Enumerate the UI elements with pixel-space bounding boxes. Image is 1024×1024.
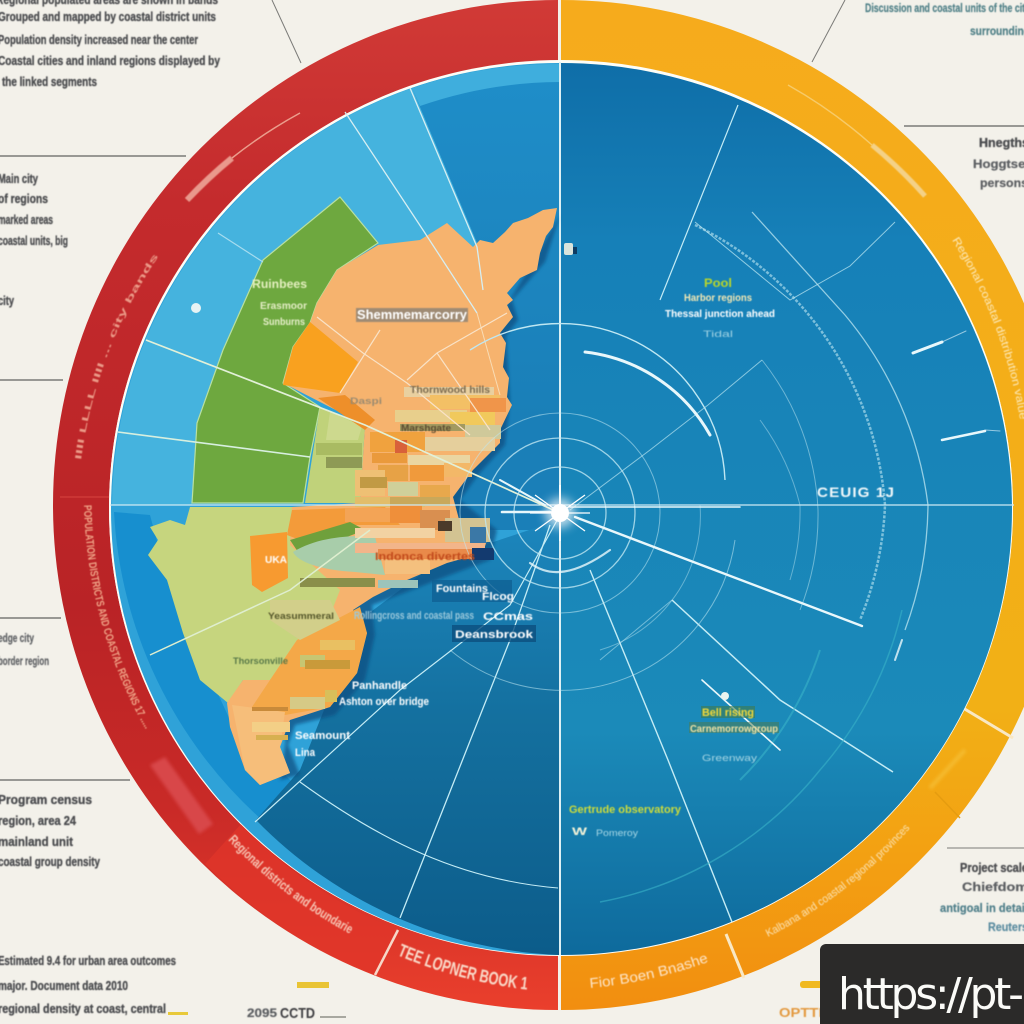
map: regions (148, 197, 557, 785)
footer label: left: CCTD (280, 1005, 315, 1022)
label: mosaic small labels: Daspi (350, 396, 382, 406)
ring highlight: red streak (150, 757, 213, 834)
text block: top left (0, 0, 220, 89)
watermark box: https://pt- (838, 969, 1024, 1020)
label: coast: Ashton over bridge (339, 696, 429, 708)
region: green band (290, 522, 365, 555)
label: green region (252, 277, 307, 328)
text block: upper left (0, 172, 68, 308)
label: upper right sea: Tidal (703, 329, 733, 339)
label: upper right sea (665, 276, 775, 339)
region: south orange coast (250, 607, 367, 715)
label: upper right sea: Harbor regions (684, 293, 752, 304)
ring labels: Regional coastal distribution values (952, 236, 1024, 420)
disc: upper-left light sector (112, 88, 480, 505)
text block: top left: Population density increased near the center (0, 33, 198, 47)
label: mosaic small labels: Thornwood hills (410, 385, 490, 396)
ring labels: Regional districts and boundaries (228, 834, 353, 934)
disc: upper sea wedge (412, 64, 559, 530)
label: coast: Flcog (482, 591, 514, 603)
grid: concentric arcs (450, 212, 928, 902)
label: lower right sea (689, 692, 779, 763)
text block: mid left: border region (0, 656, 49, 668)
text block: upper left: coastal units, big (0, 234, 68, 248)
text block: lower left: mainland unit (0, 835, 74, 849)
disc: top light band (412, 64, 559, 106)
map labels (233, 276, 895, 838)
label: upper right sea: Pool (704, 276, 732, 290)
region: orange south block (250, 532, 288, 592)
label: coast (295, 580, 536, 759)
label: mosaic small labels: UKA (265, 555, 287, 566)
text block: lower left: coastal group density (0, 855, 100, 869)
text block: upper right: Hoggtsel (973, 159, 1024, 171)
footer label: right (779, 981, 839, 1020)
text block: lower left: region, area 24 (0, 814, 76, 828)
map disc (109, 60, 1013, 956)
disc: left half (111, 63, 559, 955)
region: pale band (270, 600, 340, 640)
region: green west (192, 197, 378, 503)
footer label: left: 2095 (247, 1008, 278, 1020)
label: coast: Seamount (295, 730, 350, 742)
text block: bottom left: major. Document data 2010 (0, 979, 128, 993)
footer label: right: OPTTEN (779, 1005, 839, 1020)
label: green region: Ruinbees (252, 277, 307, 291)
text block: lower left (0, 793, 100, 869)
center star (530, 485, 590, 541)
disc: right half (561, 63, 1012, 955)
region: bright orange (283, 322, 358, 393)
text block: top right (865, 3, 1024, 38)
ring highlight: lower red segment (205, 824, 398, 975)
label: mosaic small labels (265, 385, 490, 566)
region: orange band (287, 507, 400, 540)
region: orange strip (318, 395, 375, 430)
map: coastline shadow (250, 215, 560, 780)
label: lower right sea: Carnemorrowgroup (690, 724, 778, 735)
label: lower right sea: Greenway (702, 753, 758, 763)
text block: lower right: Chiefdom (962, 882, 1024, 894)
label: coast: Fountains (436, 583, 488, 595)
label: bottom sea: Gertrude observatory (569, 804, 682, 816)
region: yellow-green central (305, 407, 365, 503)
text block: mid left (0, 633, 49, 668)
text block: upper right (973, 136, 1024, 190)
text block: bottom left: regional density at coast, central (0, 1002, 166, 1016)
footer label: left (247, 982, 346, 1022)
ring labels: TEE LOPNER BOOK 1 (399, 943, 528, 990)
region: pale green oval (293, 536, 385, 575)
region: green south patch (245, 507, 290, 535)
label: coast: CCmas (483, 611, 533, 623)
map: isle markers (191, 243, 577, 313)
region: peach main (227, 208, 557, 785)
label: bottom sea: Pomeroy (596, 828, 639, 838)
label: mosaic small labels: Indonca divertes (375, 551, 475, 563)
label: southwest (233, 611, 334, 666)
text block: top left: the linked segments (2, 75, 97, 89)
label: bottom sea (569, 804, 682, 838)
label: main region: Shemmemarcorry (357, 307, 468, 322)
highlight lines (500, 331, 1000, 750)
text block: lower right (940, 861, 1024, 934)
label: green region: Sunburns (263, 317, 305, 328)
text block: top left: Coastal cities and inland regions displayed by (0, 54, 220, 68)
label: southwest: Yeasummeral (268, 611, 334, 621)
text block: upper right: persons (980, 178, 1024, 190)
ring labels: IIII LLLL IIII ... city bands (74, 254, 158, 460)
outer ring: orange half (561, 0, 1024, 1010)
text block: bottom left: Estimated 9.4 for urban area outcomes (0, 954, 176, 968)
ring separators (60, 497, 1013, 978)
disc: lower-left bright band (114, 512, 300, 820)
watermark box (820, 944, 1024, 1024)
label: mosaic small labels: Marshgate (401, 423, 451, 433)
label: coast: Deansbrook (455, 629, 534, 641)
label: bottom sea: W (572, 826, 588, 838)
label: lower right sea: Bell rising (702, 707, 754, 719)
label: southwest: Thorsonville (233, 656, 288, 666)
text block: lower left: Program census (0, 793, 92, 807)
ring labels: Kalbana and coastal regional provinces (764, 824, 910, 937)
outer ring: red half (53, 0, 558, 1010)
region: yellow-green southwest (148, 507, 360, 703)
map patches: dense central mosaic (300, 387, 506, 702)
label: coast: Rollingcross and coastal pass (354, 610, 474, 622)
label: green region: Erasmoor (260, 301, 307, 312)
text block: top left: Grouped and mapped by coastal district units (0, 10, 216, 24)
ring labels: POPULATION DISTRICTS AND COASTAL REGIONS 17 ..... (84, 504, 148, 730)
disc: lower dark sea (256, 520, 559, 955)
text block: bottom left (0, 954, 188, 1016)
text block: upper left: marked areas (0, 213, 53, 227)
label: coast: Panhandle (352, 680, 407, 692)
label: axis: CEUIG 1J (817, 484, 895, 500)
label: coast: Lina (295, 747, 316, 759)
ring labels: Fior Boen Bnashe (590, 955, 708, 988)
grid: radial lines (110, 62, 1014, 955)
region: south peach tip (232, 705, 290, 785)
label: upper right sea: Thessal junction ahead (665, 309, 775, 320)
